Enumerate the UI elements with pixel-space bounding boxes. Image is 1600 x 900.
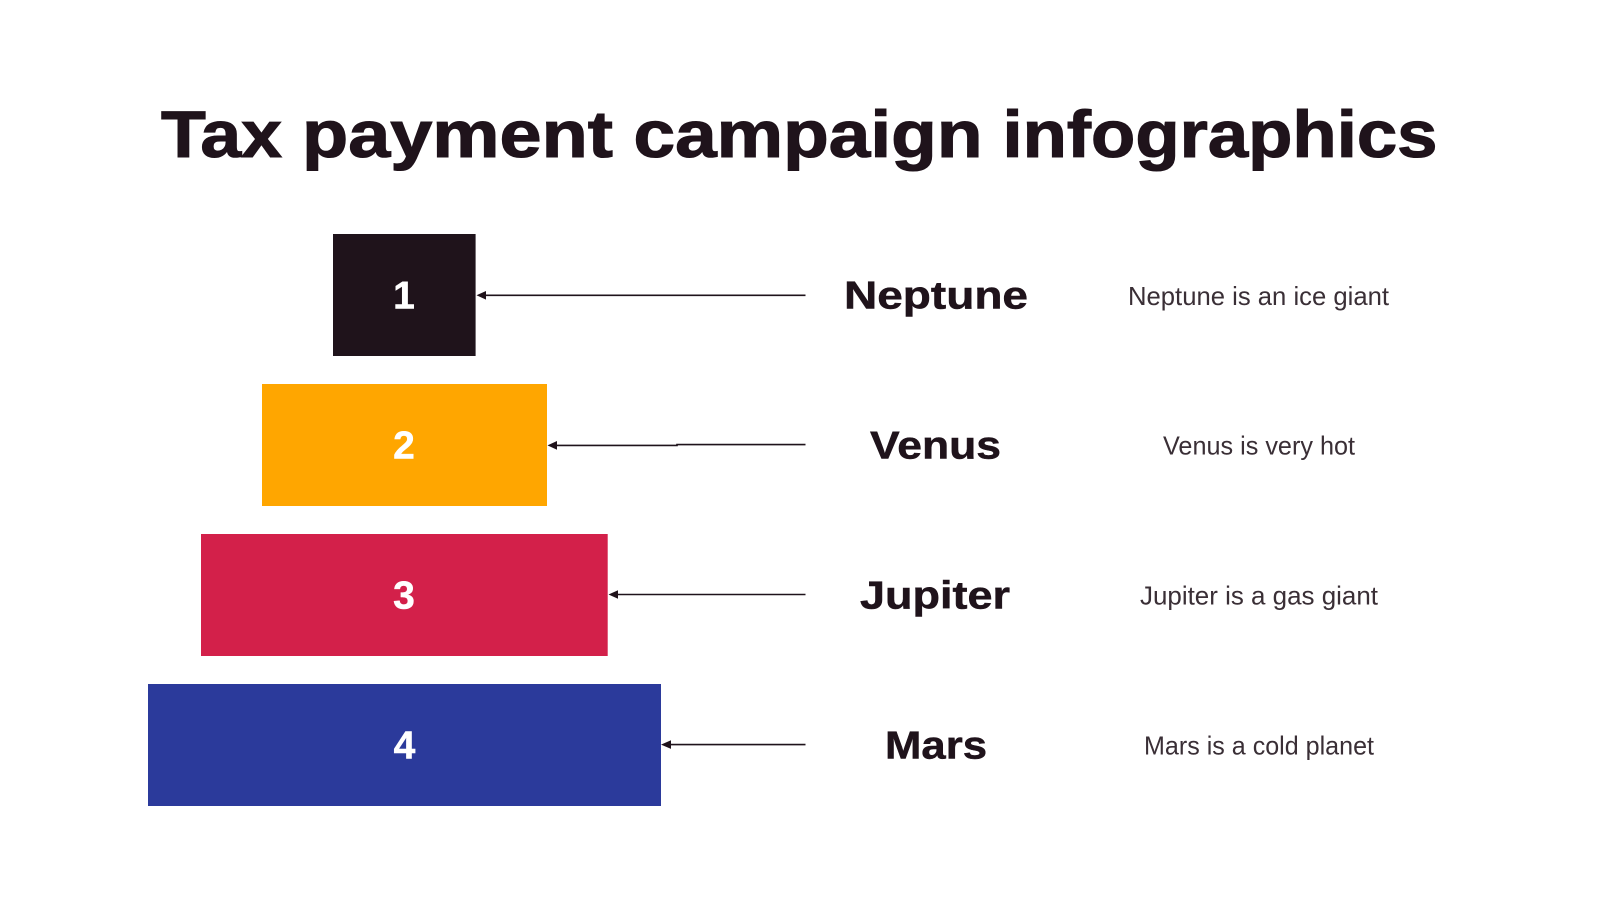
description: Jupiter: Jupiter is a gas giant [1140,580,1379,610]
title: infographics [1002,97,1438,171]
title: Tax [161,97,282,171]
label: Jupiter: Jupiter [860,574,1010,618]
arrow: Mars to tier 4 [661,740,806,749]
description: Venus: Venus is very hot [1163,430,1356,460]
label: Mars: Mars [885,724,987,768]
label: Neptune: Neptune [844,274,1028,318]
pyramid [148,234,661,806]
pyramid tier 2: orange [262,384,547,506]
pyramid tier 2: orange: 2 [393,424,415,468]
pyramid tier 3: red: 3 [393,574,415,618]
title: payment [302,97,613,171]
arrow: Venus to tier 2 [548,441,806,450]
pyramid tier 4: blue: 4 [394,724,416,768]
description: Neptune: Neptune is an ice giant [1128,281,1390,311]
label: Venus: Venus [870,424,1001,468]
title [161,97,1438,171]
pyramid tier 4: blue [148,684,661,806]
arrow: Neptune to tier 1 [476,291,806,300]
pyramid tier 1: black: 1 [393,274,415,318]
pyramid tier 1: black [333,234,476,356]
description: Mars: Mars is a cold planet [1144,730,1375,760]
title: campaign [634,97,982,171]
pyramid tier 3: red [201,534,608,656]
arrow: Jupiter to tier 3 [608,590,806,599]
